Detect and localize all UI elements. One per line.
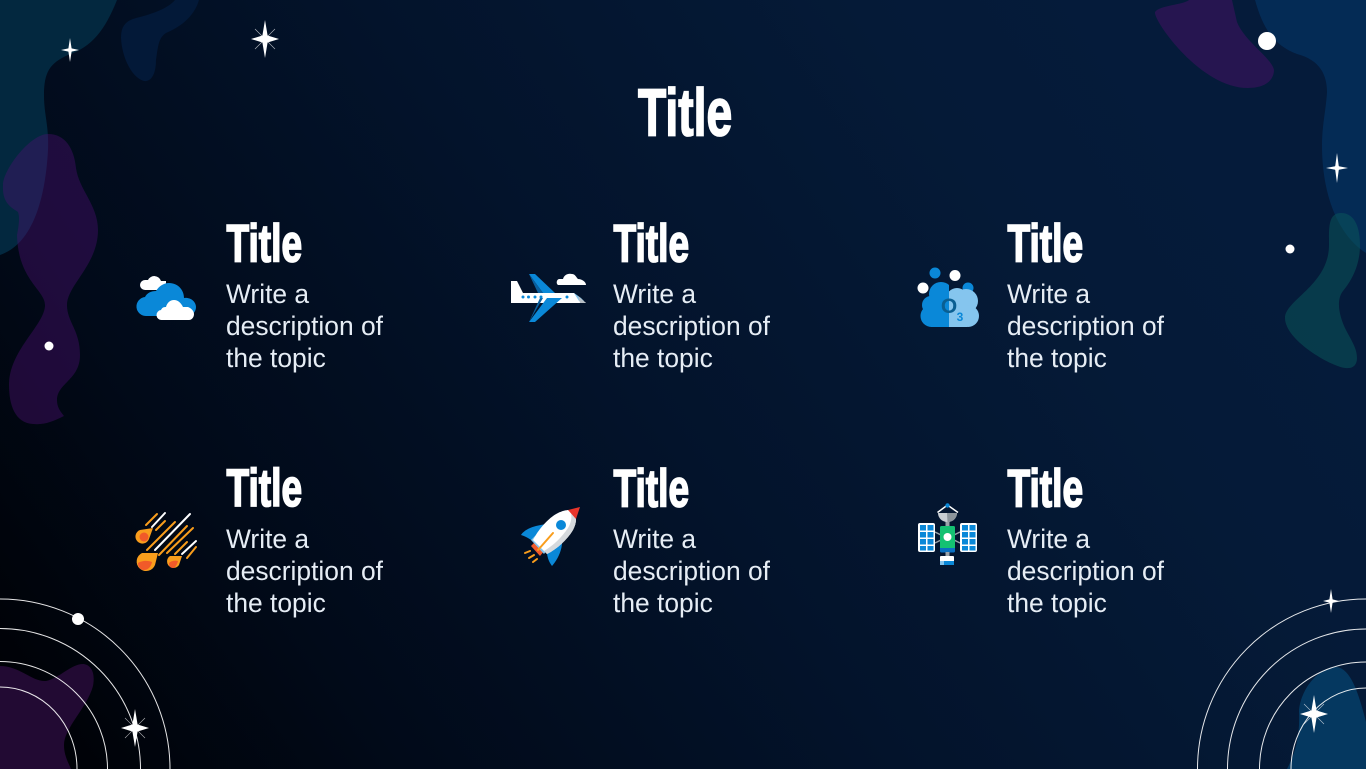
description: description of bbox=[226, 556, 384, 586]
card: ozone bbox=[918, 214, 1165, 373]
blob: top-right purple bbox=[1155, 0, 1274, 88]
icon: satellite bbox=[918, 503, 977, 565]
blob: bottom-left purple bbox=[0, 664, 94, 769]
description: the topic bbox=[226, 343, 326, 373]
description: description of bbox=[613, 311, 771, 341]
blob: bottom-right blue bbox=[1287, 667, 1366, 769]
blob: right green bbox=[1285, 213, 1360, 368]
description: the topic bbox=[1007, 343, 1107, 373]
card: meteors bbox=[135, 458, 384, 618]
blob: top-left teal bbox=[0, 0, 117, 255]
heading: Title bbox=[1008, 214, 1083, 273]
description: the topic bbox=[1007, 588, 1107, 618]
card: rocket bbox=[521, 459, 771, 618]
blob: left purple bbox=[3, 134, 98, 424]
icon: meteors bbox=[135, 513, 196, 571]
heading: Title bbox=[226, 214, 302, 273]
description: description of bbox=[1007, 556, 1165, 586]
icon: ozone cloud: O bbox=[941, 295, 957, 318]
card: clouds bbox=[136, 214, 384, 373]
icon: clouds bbox=[136, 276, 196, 320]
icon: rocket bbox=[521, 507, 580, 566]
description: Write a bbox=[613, 279, 696, 309]
description: Write a bbox=[226, 524, 309, 554]
title: Title bbox=[638, 76, 732, 151]
heading: Title bbox=[226, 458, 302, 518]
description: description of bbox=[1007, 311, 1165, 341]
icon: airplane bbox=[511, 274, 586, 322]
description: Write a bbox=[226, 279, 309, 309]
card: airplane bbox=[511, 214, 771, 373]
blob: top-right blue bbox=[1255, 0, 1366, 253]
description: the topic bbox=[613, 588, 713, 618]
heading: Title bbox=[1008, 459, 1083, 518]
description: Write a bbox=[1007, 524, 1090, 554]
description: the topic bbox=[226, 588, 326, 618]
icon: ozone cloud bbox=[918, 268, 979, 327]
description: description of bbox=[226, 311, 384, 341]
orbits: bottom-right bbox=[1198, 599, 1366, 769]
heading: Title bbox=[614, 459, 689, 518]
description: Write a bbox=[613, 524, 696, 554]
card: satellite bbox=[918, 459, 1165, 618]
description: the topic bbox=[613, 343, 713, 373]
heading: Title bbox=[614, 214, 689, 273]
description: Write a bbox=[1007, 279, 1090, 309]
icon: ozone cloud: 3 bbox=[957, 310, 964, 324]
description: description of bbox=[613, 556, 771, 586]
blob: top-left navy bbox=[121, 0, 199, 81]
orbits: bottom-left bbox=[0, 599, 170, 769]
